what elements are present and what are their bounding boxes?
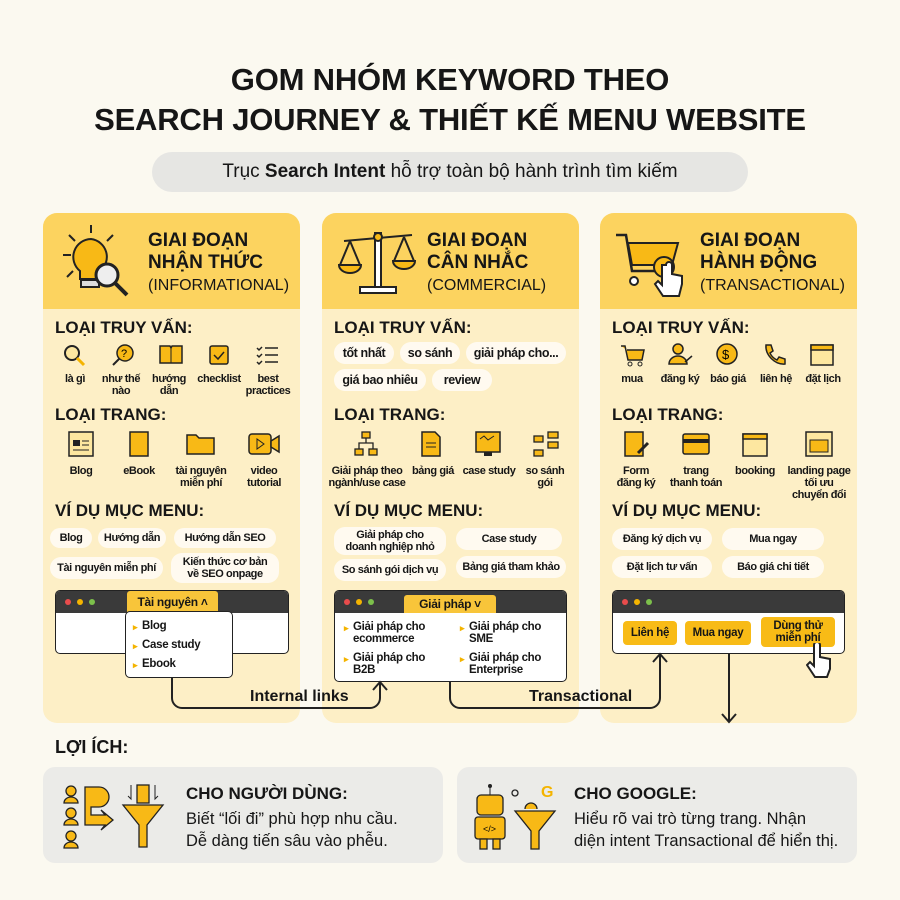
icon: robot & funnel: </> — [483, 824, 496, 834]
page type icons: tutorial — [247, 477, 281, 489]
stage heading — [700, 230, 845, 294]
page type icons: Form — [623, 465, 649, 477]
section: menu examples: VÍ DỤ MỤC MENU: — [612, 501, 761, 520]
stage heading: NHẬN THỨC — [148, 252, 263, 273]
stage heading: CÂN NHẮC — [427, 252, 528, 273]
menu chips: Case study — [482, 533, 536, 545]
page type icons: tài nguyên — [175, 465, 226, 477]
title: SEARCH JOURNEY & THIẾT KẾ MENU WEBSITE — [94, 102, 806, 137]
panel: informational — [43, 213, 300, 723]
page type icons: booking — [735, 465, 775, 477]
browser mockup with mega menu: ecommerce — [353, 633, 414, 645]
query icons — [621, 343, 841, 385]
section: page types: LOẠI TRANG: — [55, 405, 166, 424]
benefit card: users: Dễ dàng tiến sâu vào phễu. — [186, 832, 388, 850]
icon: users & funnel — [63, 784, 164, 849]
section: page types: LOẠI TRANG: — [612, 405, 723, 424]
subtitle pill: Trục Search Intent hỗ trợ toàn bộ hành trình tìm kiếm — [222, 161, 678, 182]
stage heading — [148, 230, 289, 294]
icon: pointing hand — [806, 643, 831, 678]
query icons: đăng ký — [661, 373, 699, 385]
browser mockup with mega menu: Giải pháp cho — [353, 621, 425, 633]
section: menu examples: VÍ DỤ MỤC MENU: — [334, 501, 483, 520]
browser mockup with mega menu: Giải pháp cho — [353, 652, 425, 664]
page type icons: so sánh — [526, 465, 564, 477]
query icons — [64, 344, 290, 397]
query icons: như thế — [102, 373, 140, 385]
subtitle pill — [152, 152, 748, 192]
menu chips: Hướng dẫn SEO — [185, 532, 265, 544]
menu chips: Giải pháp cho — [356, 529, 424, 541]
browser mockup with CTA buttons: Mua ngay — [693, 627, 743, 639]
menu chips — [50, 528, 279, 583]
page type icons: đăng ký — [617, 477, 655, 489]
query chips: giải pháp cho... — [474, 346, 558, 360]
menu chips: Bảng giá tham khảo — [462, 561, 560, 573]
browser mockup with CTA buttons: miễn phí — [776, 632, 820, 644]
query icons: hướng — [152, 373, 186, 385]
menu chips: So sánh gói dịch vụ — [342, 564, 438, 576]
query chips: tốt nhất — [343, 346, 385, 360]
menu chips: doanh nghiệp nhỏ — [346, 541, 434, 553]
page type icons: bảng giá — [412, 465, 454, 477]
page type icons: landing page — [787, 465, 851, 477]
section: query types: LOẠI TRUY VẤN: — [55, 318, 193, 337]
page type icons: gói — [537, 477, 553, 489]
query chips: so sánh — [408, 346, 452, 360]
menu chips: Báo giá chi tiết — [737, 561, 809, 573]
query icons: dẫn — [160, 385, 178, 397]
benefit card: google: diện intent Transactional để hiển thị. — [574, 832, 838, 850]
stage heading: (TRANSACTIONAL) — [700, 277, 845, 294]
menu chips — [334, 527, 566, 581]
label: transactional: Transactional — [529, 688, 632, 705]
browser mockup with mega menu: Enterprise — [469, 664, 523, 676]
query icons: $ — [722, 347, 730, 362]
page type icons: case study — [463, 465, 515, 477]
dropdown list: Ebook — [142, 658, 176, 670]
page type icons: miễn phí — [180, 477, 222, 489]
browser mockup with dropdown — [55, 590, 289, 654]
title — [94, 62, 806, 137]
query icons: là gì — [65, 373, 85, 385]
page type icons: eBook — [123, 465, 155, 477]
page type icons: Blog — [70, 465, 92, 477]
page type icons — [617, 431, 851, 501]
browser mockup with CTA buttons — [612, 590, 845, 654]
page type icons — [329, 431, 564, 489]
page type icons: trang — [683, 465, 709, 477]
stage heading: GIAI ĐOẠN — [427, 230, 527, 251]
page type icons: Giải pháp theo — [332, 465, 402, 477]
benefit card: users: Biết “lối đi” phù hợp nhu cầu. — [186, 810, 398, 828]
page type icons: chuyển đổi — [792, 489, 846, 501]
icon: cart with hand — [616, 234, 683, 297]
browser mockup with mega menu: Giải pháp cho — [469, 652, 541, 664]
menu chips — [612, 528, 824, 578]
menu chips: Đặt lịch tư vấn — [627, 561, 697, 573]
query icons: nào — [112, 385, 130, 397]
dropdown tab: Tài nguyên: Tài nguyên ˄ — [137, 595, 208, 609]
icon: robot & funnel: G — [541, 784, 553, 801]
dropdown list — [125, 611, 233, 678]
benefit card: google: Hiểu rõ vai trò từng trang. Nhận — [574, 810, 806, 828]
benefit card: users — [43, 767, 443, 863]
stage heading: (COMMERCIAL) — [427, 277, 546, 294]
page type icons: thanh toán — [670, 477, 722, 489]
query chips — [334, 342, 566, 391]
query icons: checklist — [197, 373, 241, 385]
stage heading: GIAI ĐOẠN — [148, 230, 248, 251]
stage heading: (INFORMATIONAL) — [148, 277, 289, 294]
stage heading — [427, 230, 546, 294]
stage heading: GIAI ĐOẠN — [700, 230, 800, 251]
benefit card: google: CHO GOOGLE: — [574, 784, 697, 803]
browser mockup with mega menu: Giải pháp ˅ — [419, 597, 481, 611]
dropdown tab: Tài nguyên — [127, 591, 218, 613]
menu chips: Tài nguyên miễn phí — [57, 562, 156, 574]
query icons: liên hệ — [760, 373, 792, 385]
query icons: best — [257, 373, 279, 385]
query icons: đặt lịch — [805, 373, 841, 385]
title: GOM NHÓM KEYWORD THEO — [231, 62, 669, 97]
browser mockup with CTA buttons: Dùng thử — [773, 620, 823, 632]
menu chips: Blog — [60, 532, 82, 544]
menu chips: về SEO onpage — [187, 568, 263, 580]
section: menu examples: VÍ DỤ MỤC MENU: — [55, 501, 204, 520]
browser mockup with mega menu — [334, 590, 567, 682]
section: query types: LOẠI TRUY VẤN: — [612, 318, 750, 337]
benefit card: users: CHO NGƯỜI DÙNG: — [186, 784, 348, 803]
icon: lightbulb — [63, 225, 128, 296]
query icons: mua — [621, 373, 643, 385]
menu chips: Đăng ký dịch vụ — [623, 533, 701, 545]
panel: commercial — [322, 213, 579, 723]
benefit card: google — [457, 767, 857, 863]
stage heading: HÀNH ĐỘNG — [700, 252, 817, 273]
browser mockup with CTA buttons: Liên hệ — [631, 627, 669, 639]
section: query types: LOẠI TRUY VẤN: — [334, 318, 472, 337]
page type icons — [68, 431, 281, 489]
dropdown list: Case study — [142, 639, 200, 651]
section: page types: LOẠI TRANG: — [334, 405, 445, 424]
browser mockup with mega menu: SME — [469, 633, 493, 645]
query icons: practices — [246, 385, 290, 397]
menu chips: Hướng dẫn — [104, 532, 160, 544]
query icons: báo giá — [710, 373, 746, 385]
query chips: giá bao nhiêu — [342, 373, 418, 387]
icon: robot & funnel — [474, 784, 556, 850]
label: internal links: Internal links — [250, 688, 349, 705]
page type icons: video — [251, 465, 277, 477]
menu chips: Kiến thức cơ bản — [183, 556, 267, 568]
heading: benefits: LỢI ÍCH: — [55, 737, 128, 757]
menu chips: Mua ngay — [749, 533, 797, 545]
icon: scales — [338, 232, 416, 294]
dropdown list: Blog — [142, 620, 166, 632]
panel: transactional — [600, 213, 857, 723]
query chips: review — [444, 373, 480, 387]
page type icons: tối ưu — [805, 477, 833, 489]
page type icons: ngành/use case — [329, 477, 405, 489]
browser mockup with mega menu: Giải pháp cho — [469, 621, 541, 633]
browser mockup with mega menu: B2B — [353, 664, 375, 676]
query icons: ? — [121, 348, 127, 360]
